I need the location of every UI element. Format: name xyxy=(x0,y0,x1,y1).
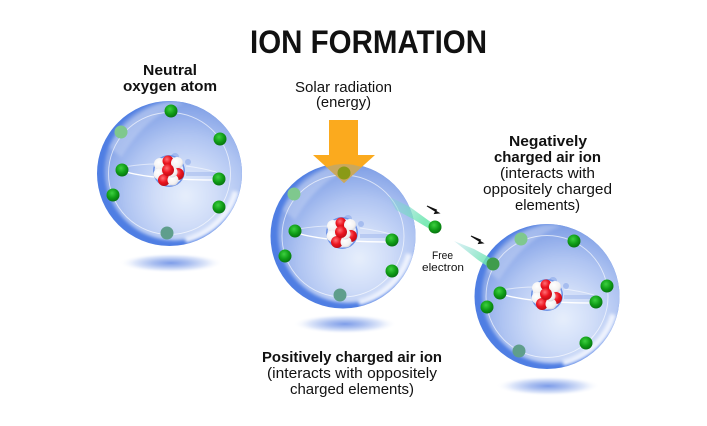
label: negatively charged air ion: oppositely charged xyxy=(483,181,612,198)
electron trail xyxy=(388,196,432,228)
electron under arrow xyxy=(338,166,350,180)
sphere xyxy=(474,224,622,369)
nucleus xyxy=(153,153,191,187)
label: positively charged air ion xyxy=(262,349,442,398)
electron trail xyxy=(454,241,494,268)
label: free electron: Free xyxy=(432,250,453,262)
heading: neutral oxygen atom xyxy=(123,62,217,95)
sphere xyxy=(270,163,418,308)
atom: negative ion xyxy=(454,224,622,396)
label: positively charged air ion: charged elements) xyxy=(290,381,414,398)
label: negatively charged air ion xyxy=(483,133,612,214)
arrow: solar radiation xyxy=(313,120,375,183)
title: ION FORMATION xyxy=(250,24,487,60)
heading: neutral oxygen atom: oxygen atom xyxy=(123,78,217,95)
electrons xyxy=(480,232,614,358)
arrow: electron direction 1 xyxy=(427,206,439,214)
atom: neutral oxygen xyxy=(97,100,244,273)
label: positively charged air ion: Positively charged air ion xyxy=(262,349,442,366)
label: negatively charged air ion: charged air ion xyxy=(494,149,601,166)
label: solar radiation: (energy) xyxy=(316,94,371,111)
nucleus xyxy=(326,215,364,249)
shadow xyxy=(293,314,397,334)
nucleus xyxy=(531,277,569,311)
electrons xyxy=(106,104,226,240)
label: negatively charged air ion: elements) xyxy=(515,197,580,214)
label: negatively charged air ion: Negatively xyxy=(509,133,588,150)
label: solar radiation: Solar radiation xyxy=(295,79,392,96)
label: solar radiation xyxy=(295,79,392,111)
heading: neutral oxygen atom: Neutral xyxy=(143,62,197,79)
free electron xyxy=(428,220,442,234)
label: negatively charged air ion: (interacts with xyxy=(500,165,595,182)
label: free electron xyxy=(422,250,464,274)
orbit lines xyxy=(297,226,392,242)
orbit lines xyxy=(501,287,596,303)
shadow xyxy=(119,253,223,273)
label: free electron: electron xyxy=(422,262,464,274)
shadow xyxy=(496,376,600,396)
electrons xyxy=(278,188,398,302)
atom: positive ion xyxy=(270,163,432,334)
arrow: electron direction 2 xyxy=(471,236,483,244)
sphere xyxy=(97,100,244,246)
label: positively charged air ion: (interacts with oppositely xyxy=(267,365,438,382)
orbit lines xyxy=(123,164,218,180)
